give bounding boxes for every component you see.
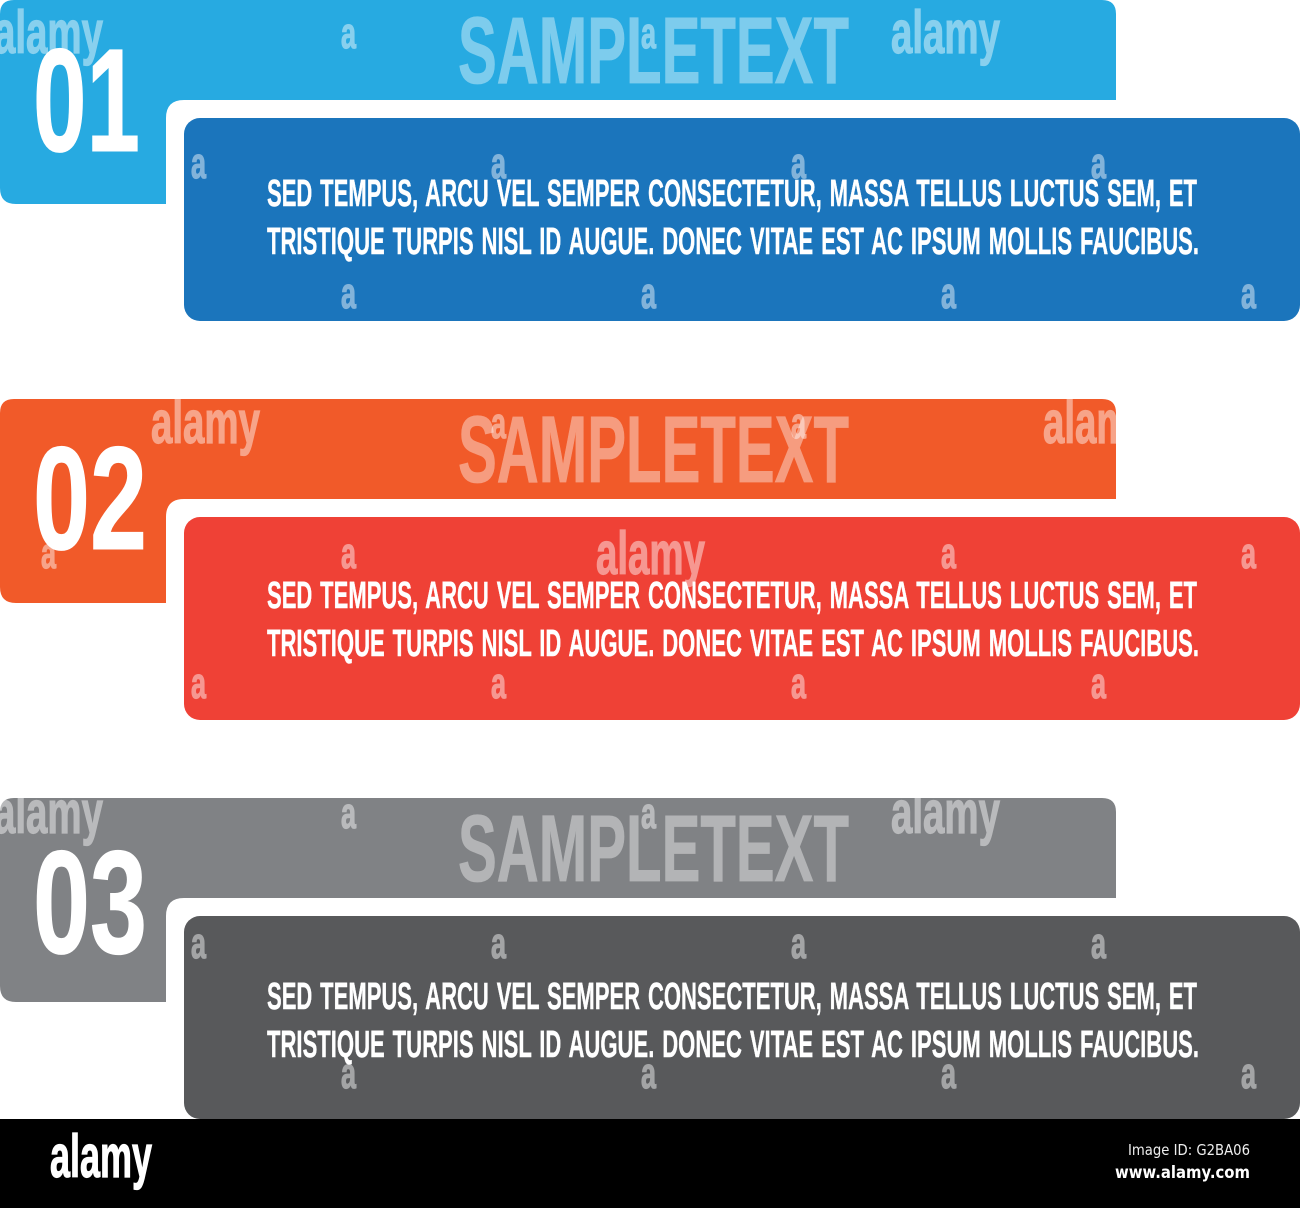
website: www.alamy.com <box>1115 1163 1250 1183</box>
heading: step 03: SAMPLETEXT <box>458 796 849 902</box>
watermark overlay: a <box>1241 1049 1256 1098</box>
watermark overlay: a <box>491 919 506 968</box>
body box: step 03 <box>184 916 1300 1119</box>
heading: step 02: SAMPLETEXT <box>458 397 849 503</box>
number: 01: 01 <box>33 19 140 183</box>
number: 02: 02 <box>33 417 147 581</box>
text block: step 02 <box>267 575 1199 665</box>
watermark overlay: a <box>791 139 806 188</box>
header tab: step 02 <box>0 399 1116 603</box>
watermark overlay: a <box>941 529 956 578</box>
watermark overlay: a <box>791 659 806 708</box>
watermark overlay: a <box>791 399 806 448</box>
watermark overlay: alamy <box>891 0 1000 66</box>
header tab: step 01 <box>0 0 1116 204</box>
body box: step 02 <box>184 517 1300 720</box>
watermark overlay: a <box>491 399 506 448</box>
footer logo: alamy <box>50 1123 152 1190</box>
watermark overlay: a <box>641 789 656 838</box>
watermark overlay: a <box>941 1049 956 1098</box>
header tab: step 03 <box>0 798 1116 1002</box>
panel: step 01 <box>0 0 1300 321</box>
watermark overlay: a <box>41 529 56 578</box>
watermark overlay: a <box>641 9 656 58</box>
number: 03: 03 <box>33 821 147 985</box>
watermark overlay: a <box>641 1049 656 1098</box>
text block: step 01 <box>267 173 1199 263</box>
watermark overlay: a <box>191 919 206 968</box>
watermark overlay: a <box>1241 529 1256 578</box>
panel: step 02 <box>0 397 1300 720</box>
watermark overlay: a <box>341 789 356 838</box>
watermark overlay: alamy <box>596 520 705 587</box>
image ID: Image ID: G2BA06 <box>1128 1141 1250 1159</box>
watermark overlay: a <box>341 529 356 578</box>
watermark overlay: alamy <box>1043 389 1152 456</box>
watermark overlay: a <box>641 269 656 318</box>
watermark overlay: a <box>341 1049 356 1098</box>
watermark overlay: alamy <box>891 779 1000 846</box>
watermark overlay: a <box>941 269 956 318</box>
heading: step 01: SAMPLETEXT <box>458 0 849 104</box>
watermark overlay: a <box>191 659 206 708</box>
watermark overlay: a <box>1091 659 1106 708</box>
watermark overlay: a <box>491 139 506 188</box>
footer bar <box>0 1119 1300 1208</box>
watermark overlay: a <box>791 919 806 968</box>
watermark overlay: a <box>1091 139 1106 188</box>
watermark overlay: a <box>341 269 356 318</box>
watermark overlay: a <box>491 659 506 708</box>
watermark overlay: a <box>1091 919 1106 968</box>
watermark overlay: a <box>1241 269 1256 318</box>
watermark overlay: a <box>191 139 206 188</box>
panel: step 03 <box>0 796 1300 1119</box>
body box: step 01 <box>184 118 1300 321</box>
watermark overlay: alamy <box>151 389 260 456</box>
watermark overlay: a <box>341 9 356 58</box>
text block: step 03 <box>267 976 1199 1066</box>
